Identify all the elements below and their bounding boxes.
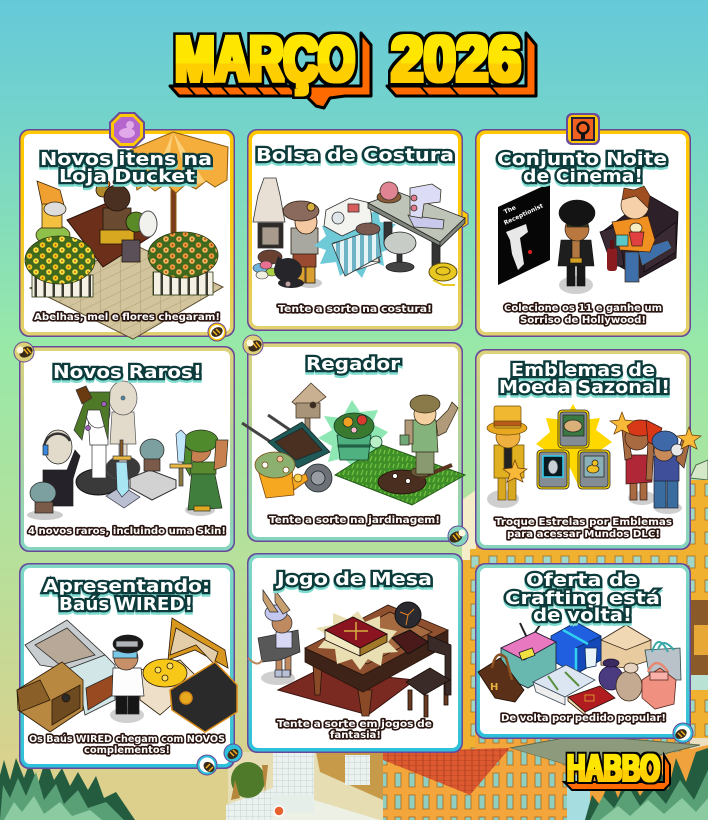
icon: bee, card 9 bbox=[673, 723, 693, 743]
badge: palette bbox=[558, 410, 589, 448]
title text: MARÇO bbox=[175, 23, 355, 95]
icon: bee, card 4 bbox=[14, 342, 35, 362]
panel: Conjunto Noite de Cinema bbox=[475, 129, 691, 337]
caption: Colecione os 11 e ganhe um bbox=[504, 303, 662, 314]
heading: Conjunto Noite bbox=[497, 150, 667, 170]
table bbox=[305, 605, 448, 716]
vine mannequin bbox=[74, 386, 110, 478]
character with flower crown bbox=[96, 179, 146, 262]
brown handbag: H bbox=[490, 682, 498, 693]
city scene behind the cards bbox=[226, 460, 708, 820]
title extrusion bbox=[170, 33, 536, 108]
logo extrusion bbox=[564, 755, 670, 790]
white bench arms bbox=[139, 211, 157, 237]
icon: bee, card 1 bbox=[208, 323, 226, 341]
panel: Bolsa de Costura bbox=[247, 129, 468, 331]
title year: 2026 bbox=[391, 23, 521, 95]
icon: bee, card 5 lower bbox=[447, 526, 468, 546]
icon: bee, card 7 lower bbox=[197, 755, 217, 775]
character with sunglasses bbox=[558, 200, 595, 294]
icon: cinema badge bbox=[566, 113, 600, 145]
skin character with headphones bbox=[43, 430, 80, 506]
beige mannequin bbox=[106, 381, 140, 480]
heading third line: de volta! bbox=[533, 606, 632, 626]
red book bbox=[568, 686, 615, 715]
HABBO logo bbox=[564, 748, 670, 790]
armchair bbox=[600, 196, 678, 278]
notch bbox=[462, 210, 468, 228]
buttons bbox=[253, 261, 278, 279]
panel: Jogo de Mesa bbox=[247, 553, 463, 753]
heading: Regador bbox=[306, 355, 400, 375]
orange flower box bbox=[148, 232, 218, 295]
yellow watering can bbox=[255, 452, 308, 498]
green starburst bbox=[318, 400, 388, 470]
badge: duck bbox=[578, 450, 610, 489]
pin cushion bbox=[377, 182, 401, 203]
heading: Oferta de bbox=[526, 571, 638, 591]
icon: bee, card 7 side bbox=[224, 744, 242, 762]
vine mannequin stand bbox=[76, 469, 120, 495]
heading: Novos Raros! bbox=[53, 363, 202, 383]
gold character bbox=[487, 406, 527, 508]
panel: Novos itens na Loja Ducket bbox=[19, 129, 235, 339]
heading: Novos itens na bbox=[40, 150, 212, 170]
beige sack bbox=[616, 663, 642, 701]
second sword bbox=[170, 430, 192, 486]
shopping bag bbox=[645, 642, 681, 680]
heading second line: de Cinema! bbox=[523, 167, 643, 187]
logo text: HABBO bbox=[567, 748, 660, 790]
badge: robot bbox=[537, 450, 569, 489]
grass patch bbox=[335, 445, 465, 505]
right foliage bbox=[585, 748, 708, 820]
bench bbox=[67, 203, 150, 267]
horned character bbox=[248, 590, 300, 685]
woman with red hair bbox=[622, 420, 662, 505]
blue gift bbox=[551, 622, 601, 674]
caption: Troque Estrelas por Emblemas bbox=[495, 517, 672, 528]
icon: bee, card 5 bbox=[243, 335, 264, 355]
poster bbox=[498, 183, 550, 285]
green character bbox=[182, 430, 228, 516]
title: Março 2026 bbox=[170, 23, 536, 108]
poster: The bbox=[503, 204, 517, 216]
dark book bbox=[392, 630, 428, 654]
star left bbox=[610, 412, 634, 434]
floor tiles bbox=[30, 245, 223, 339]
poster: Receptionist bbox=[503, 202, 544, 227]
heading: Bolsa de Costura bbox=[256, 146, 454, 166]
blue starburst bbox=[314, 205, 396, 278]
brown handbag bbox=[478, 655, 524, 702]
silver chest bbox=[25, 620, 115, 715]
seamstress character bbox=[283, 201, 322, 288]
crystal sword on pedestal bbox=[106, 440, 140, 508]
character in white coat bbox=[110, 635, 144, 723]
gnome bbox=[36, 181, 70, 245]
wheelbarrow bbox=[242, 415, 332, 492]
yellow flower box bbox=[25, 236, 95, 297]
gardener character bbox=[400, 395, 458, 477]
golden chest bbox=[140, 618, 228, 715]
cola bottle bbox=[607, 240, 617, 271]
caption: 4 novos raros, incluindo uma Skin! bbox=[28, 526, 226, 537]
wooden chest bbox=[17, 662, 83, 732]
work table bbox=[368, 192, 465, 268]
rug bbox=[278, 670, 415, 715]
panel: Emblemas de Moeda Sazonal bbox=[475, 349, 701, 550]
caption: Os Baús WIRED chegam com NOVOS bbox=[29, 733, 225, 745]
red book bbox=[325, 617, 387, 656]
panel: Oferta de Crafting está de volta bbox=[475, 563, 691, 739]
pink bag bbox=[642, 663, 676, 709]
parasol bbox=[130, 132, 228, 245]
black cat bbox=[274, 256, 304, 288]
caption second line: complementos! bbox=[84, 745, 170, 756]
sewing machine bbox=[408, 184, 444, 229]
heading second line: Crafting está bbox=[505, 589, 660, 609]
robot pet on platform bbox=[130, 439, 176, 500]
heading second line: Baús WIRED! bbox=[59, 595, 193, 615]
caption second line: Sorriso de Hollywood! bbox=[520, 315, 646, 326]
blue book stack bbox=[533, 665, 595, 705]
left foliage bbox=[0, 758, 135, 820]
robot pet left bbox=[27, 482, 63, 520]
star bbox=[503, 460, 527, 482]
birdhouse bbox=[292, 383, 326, 430]
cream box bbox=[601, 625, 651, 668]
black chest bbox=[170, 662, 237, 732]
caption: Abelhas, mel e flores chegaram! bbox=[34, 312, 220, 323]
measuring tape bbox=[429, 263, 457, 285]
heading: Jogo de Mesa bbox=[276, 570, 432, 590]
man with helmet bbox=[652, 431, 690, 514]
panel: Apresentando Baús WIRED bbox=[17, 563, 237, 769]
retro tv bbox=[501, 622, 556, 688]
sewing box bbox=[324, 198, 381, 276]
heading: Emblemas de bbox=[511, 361, 655, 381]
icon: duck badge bbox=[109, 112, 145, 148]
caption second line: para acessar Mundos DLC! bbox=[507, 529, 660, 540]
heading: Apresentando: bbox=[43, 577, 210, 597]
caption: Tente a sorte em jogos de bbox=[277, 719, 433, 730]
caption second line: fantasia! bbox=[330, 730, 381, 741]
heading second line: Loja Ducket bbox=[59, 167, 195, 187]
stool bbox=[384, 232, 416, 272]
star right bbox=[677, 427, 701, 449]
chair bbox=[406, 635, 451, 717]
caption: Tente a sorte na costura! bbox=[278, 304, 432, 315]
yellow burst bbox=[536, 404, 612, 485]
mannequin bbox=[253, 178, 285, 264]
caption: Tente a sorte na jardinagem! bbox=[269, 515, 440, 526]
dirt mound with tools bbox=[378, 465, 452, 494]
purple sack bbox=[599, 659, 623, 690]
lava orb bbox=[395, 602, 421, 628]
panel: Novos Raros bbox=[19, 346, 235, 552]
green bucket with flowers bbox=[334, 413, 382, 460]
heading second line: Moeda Sazonal! bbox=[499, 378, 670, 398]
caption: De volta por pedido popular! bbox=[501, 713, 666, 724]
popcorn character bbox=[612, 186, 672, 282]
cream burst bbox=[316, 611, 398, 670]
panel: Regador bbox=[242, 342, 465, 542]
